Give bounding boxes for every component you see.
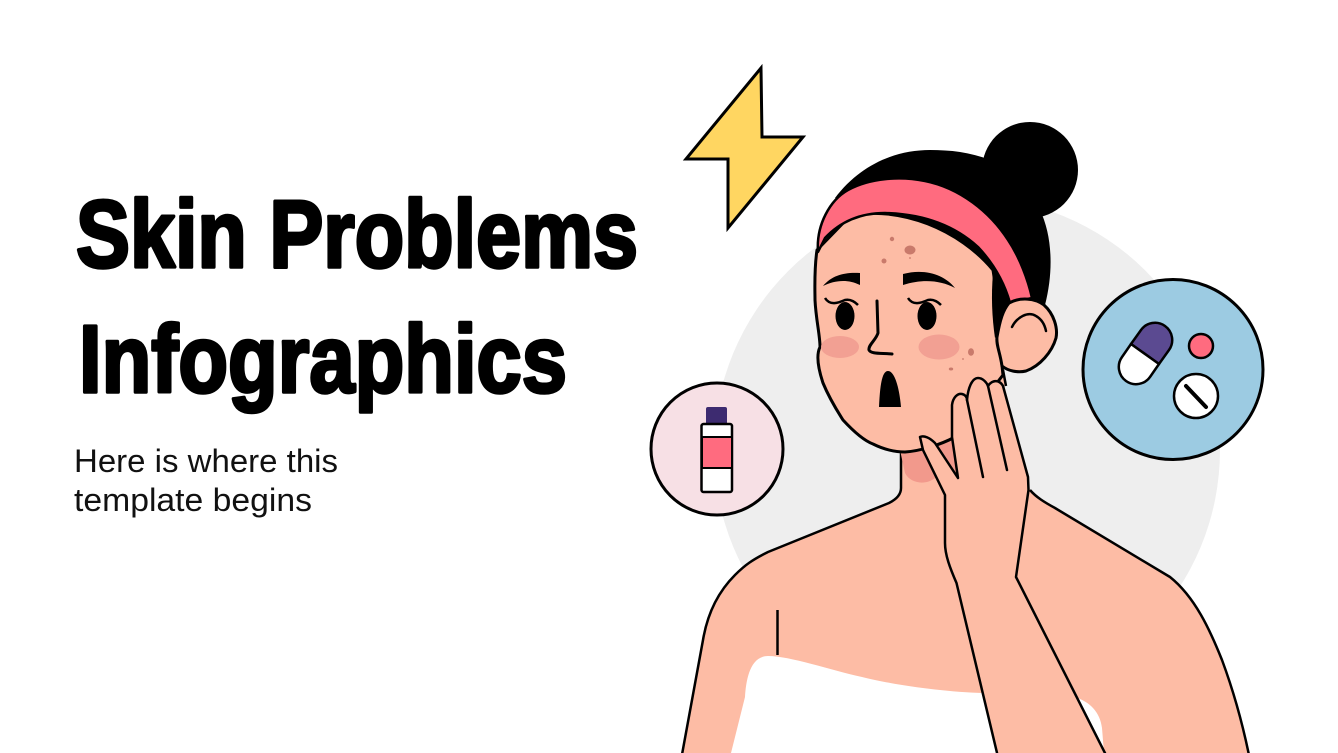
body and shoulders [681,370,1250,753]
face [815,213,1003,452]
eyebrows [823,272,955,288]
nose [869,301,892,354]
title: Skin Problems [76,181,638,288]
headband [818,178,1032,303]
background circle [714,197,1220,703]
subtitle text: template begins [74,482,312,518]
icon: pills badge [1083,280,1263,460]
title [76,181,638,413]
icon: cosmetic bottle badge [651,383,783,515]
cheek blush [821,334,960,360]
hair and bun [835,122,1078,305]
mouth [879,371,901,407]
sideburn hair [992,274,1010,338]
subtitle text [74,443,338,518]
icon: lightning bolt [686,68,803,228]
character: woman with skin problems [681,122,1250,753]
neck shadow [900,436,958,483]
subtitle text: Here is where this [74,443,338,479]
arm line on shoulder [776,610,779,655]
hand and arm [920,378,1108,753]
towel [731,656,1104,753]
acne spots [882,237,974,370]
eyes [825,298,941,330]
title: Infographics [79,306,567,413]
ear [997,299,1056,372]
